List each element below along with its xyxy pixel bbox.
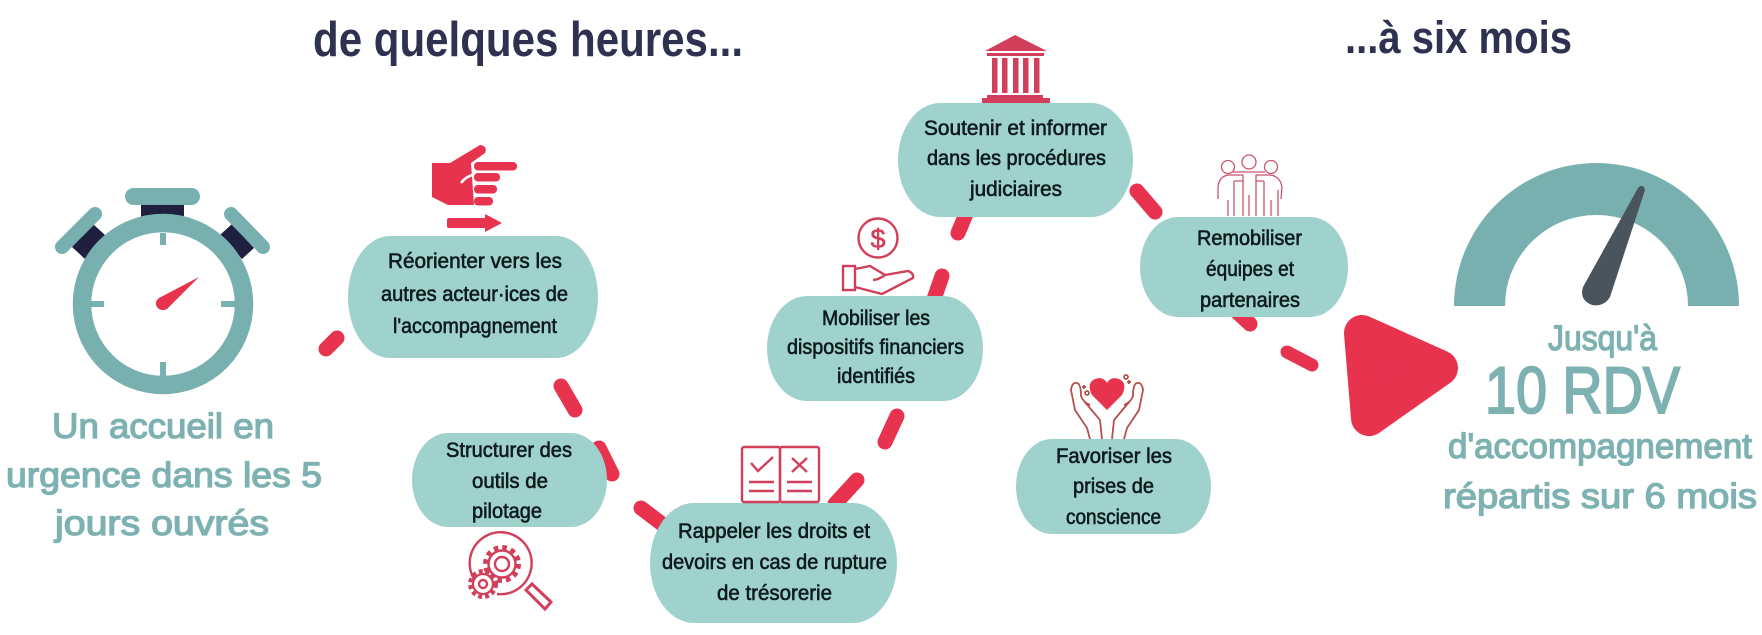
step: structurer: Structurer des	[446, 439, 572, 462]
step: soutenir: Soutenir et informer	[924, 117, 1107, 140]
step: rappeler	[650, 503, 897, 623]
step: soutenir	[898, 103, 1133, 217]
text: accueil en urgence: Un accueil en	[52, 407, 274, 446]
text: jusqu'à 10 RDV: d'accompagnement	[1448, 427, 1752, 466]
step: soutenir: judiciaires	[969, 178, 1062, 201]
text: jusqu'à 10 RDV	[1443, 319, 1757, 516]
step: réorienter: Réorienter vers les	[388, 250, 562, 273]
step: structurer	[412, 433, 607, 527]
icon: hand with coin: $	[870, 224, 886, 254]
title: à six mois: ...à six mois	[1345, 12, 1572, 63]
step: rappeler: de trésorerie	[717, 582, 832, 605]
icon: hand with coin	[843, 218, 913, 294]
text: accueil en urgence	[6, 407, 322, 543]
title: de quelques heures: de quelques heures...	[313, 13, 743, 67]
icon: courthouse	[982, 35, 1050, 103]
icon: stopwatch	[62, 188, 263, 385]
step: mobiliser: identifiés	[837, 365, 915, 388]
icon: group of people	[1218, 155, 1282, 216]
dashed path	[326, 191, 1312, 527]
icon: pointing hand and arrow	[432, 145, 517, 232]
icon: magnifier with gears	[470, 532, 551, 609]
text: accueil en urgence: urgence dans les 5	[6, 456, 322, 495]
step: remobiliser: équipes et	[1206, 258, 1294, 281]
step: mobiliser	[767, 296, 983, 401]
step: remobiliser: Remobiliser	[1197, 227, 1302, 250]
icon: open book with check and cross	[742, 447, 819, 502]
step: remobiliser	[1140, 217, 1348, 317]
text: accueil en urgence: jours ouvrés	[54, 504, 269, 543]
step: rappeler: Rappeler les droits et	[678, 520, 870, 543]
step: remobiliser: partenaires	[1200, 289, 1300, 312]
text: jusqu'à 10 RDV: 10 RDV	[1485, 353, 1680, 427]
step: réorienter	[348, 236, 598, 358]
step: favoriser: conscience	[1066, 506, 1161, 529]
text: jusqu'à 10 RDV: Jusqu'à	[1548, 319, 1657, 358]
step: mobiliser: Mobiliser les	[822, 307, 930, 330]
step: rappeler: devoirs en cas de rupture	[662, 551, 887, 574]
step: favoriser	[1016, 439, 1211, 534]
step: structurer: pilotage	[472, 500, 542, 523]
step: favoriser: Favoriser les	[1056, 445, 1172, 468]
arrowhead	[1362, 333, 1440, 418]
text: jusqu'à 10 RDV: répartis sur 6 mois	[1443, 477, 1757, 516]
step: soutenir: dans les procédures	[927, 147, 1106, 170]
step: réorienter: autres acteur·ices de	[381, 283, 568, 306]
icon: gauge	[1454, 163, 1739, 306]
step: réorienter: l'accompagnement	[393, 315, 557, 338]
step: structurer: outils de	[472, 470, 548, 493]
step: favoriser: prises de	[1073, 475, 1154, 498]
icon: hands holding a heart	[1071, 375, 1143, 439]
step: mobiliser: dispositifs financiers	[787, 336, 964, 359]
